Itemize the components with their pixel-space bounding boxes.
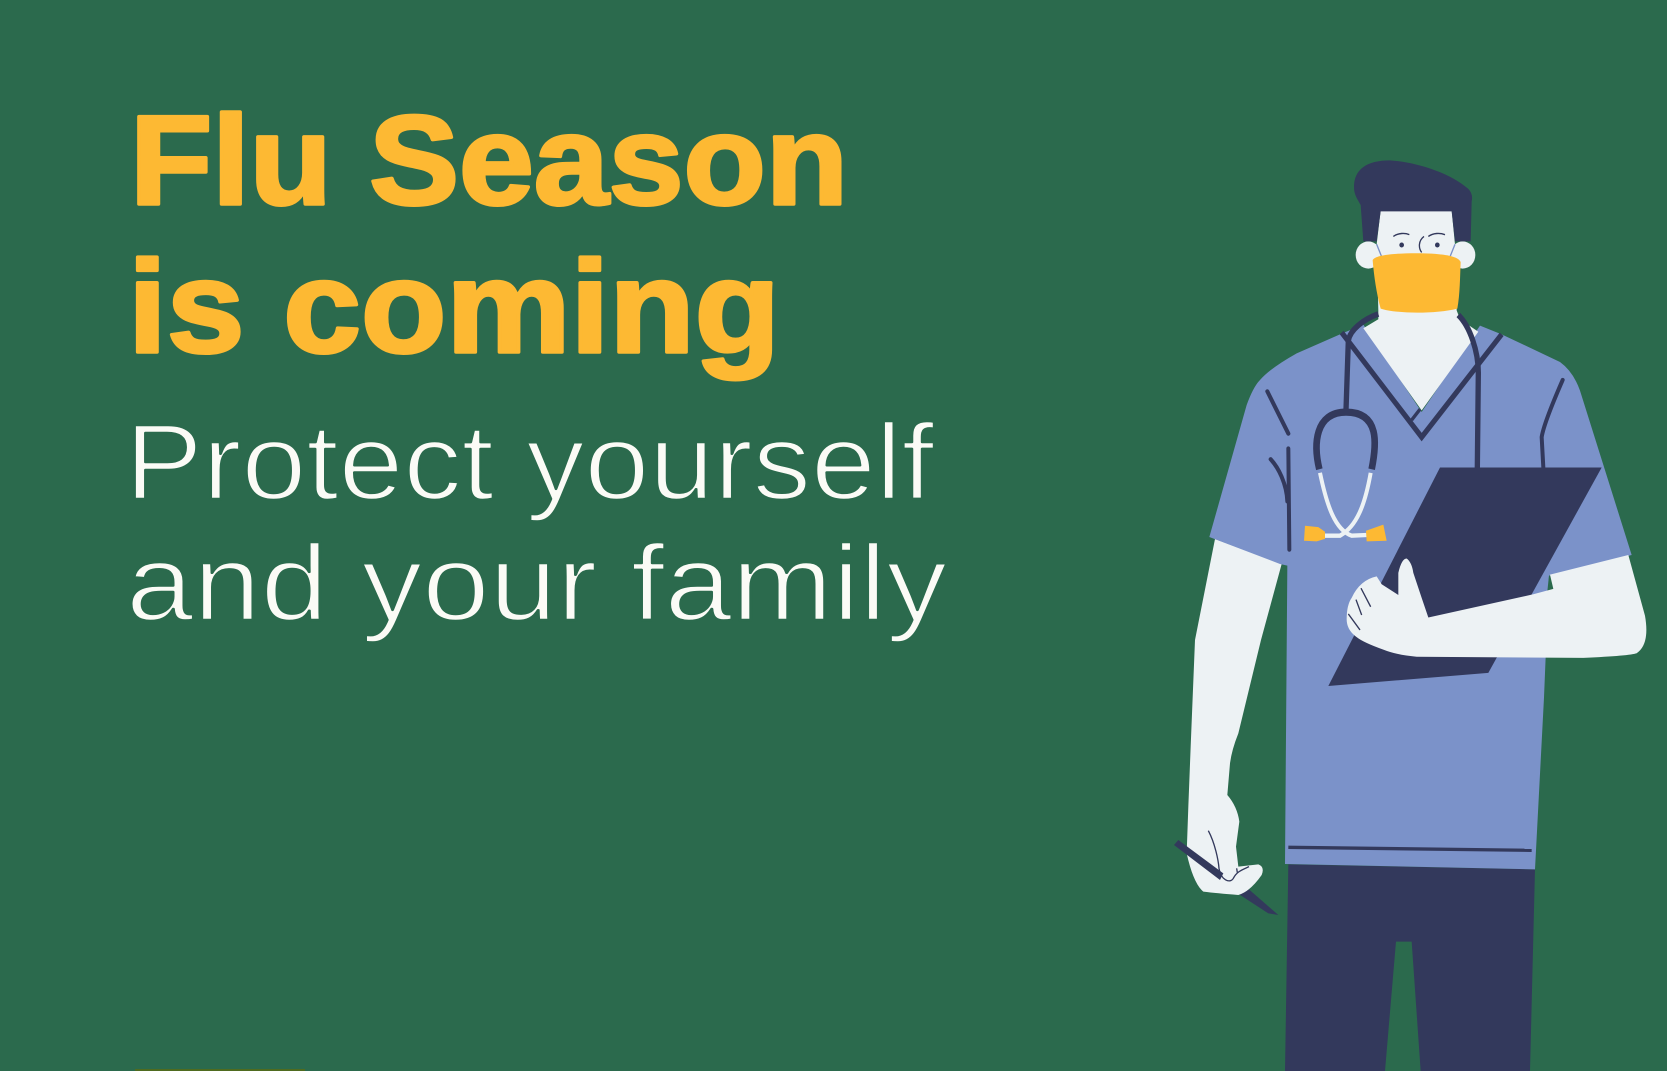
head and neck [1354,160,1478,410]
collar and seam lines [1267,332,1563,550]
trousers [1285,864,1535,1071]
subtitle: Protect yourself [125,401,935,522]
scrubs top [1209,325,1632,869]
right arm holding clipboard [1347,555,1646,658]
face details [1393,233,1445,252]
hair [1354,160,1472,241]
face mask [1373,253,1461,313]
clipboard [1328,467,1602,686]
title: is coming [128,233,780,380]
illustration: health worker in scrubs and mask [1174,160,1646,1071]
subtitle [125,401,947,643]
hem seam [1288,847,1532,850]
subtitle: and your family [126,522,947,643]
title: Flu Season [130,89,848,231]
footer accent line [135,1069,305,1071]
left arm with hand [1174,539,1282,915]
stethoscope [1304,314,1478,541]
title [128,89,848,380]
